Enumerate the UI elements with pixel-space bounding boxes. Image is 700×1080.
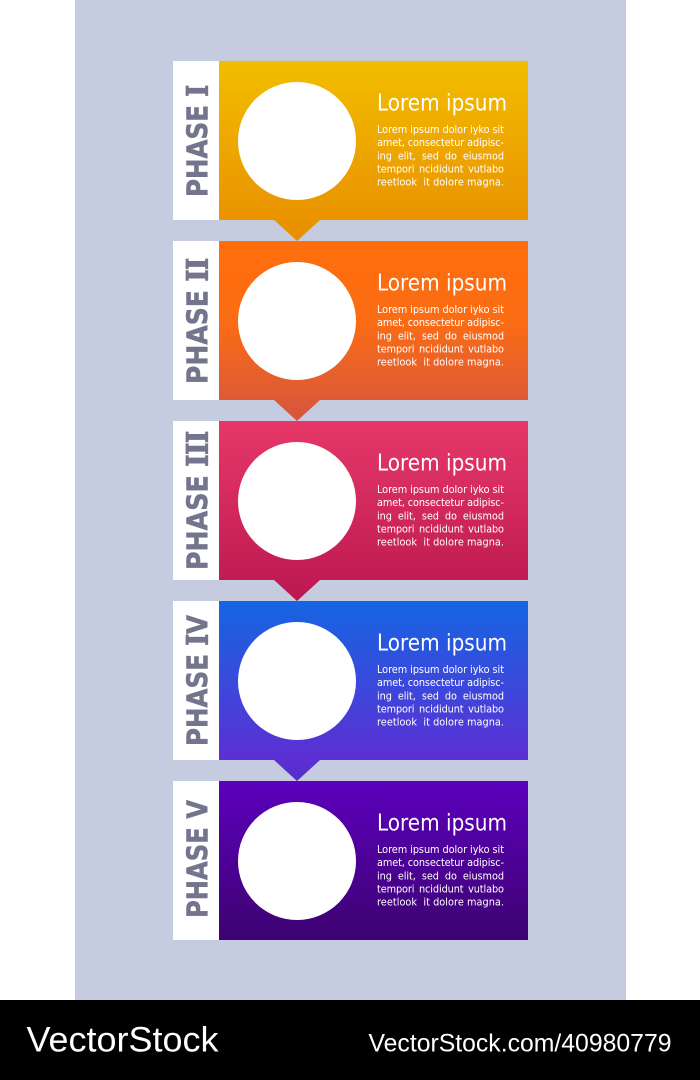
phase V title: Lorem ipsum <box>377 811 507 837</box>
phase V body text: amet, consectetur adipisc- <box>377 856 504 869</box>
phase III body text: reetlook it dolore magna. <box>377 536 504 548</box>
phase II label tab <box>173 241 219 400</box>
phase III label tab <box>173 421 219 580</box>
panel: phase III <box>173 421 528 601</box>
phase I body text: amet, consectetur adipisc- <box>377 136 504 149</box>
footer image reference: VectorStock.com/40980779 <box>368 1030 672 1058</box>
phase I body text: ing elit, sed do eiusmod <box>377 150 504 162</box>
phase III body text: tempori ncididunt vutlabo <box>377 522 504 536</box>
phase III body text: amet, consectetur adipisc- <box>377 496 504 509</box>
phase IV body text: amet, consectetur adipisc- <box>377 676 504 689</box>
phase V body text <box>377 843 504 908</box>
phase III body text: ing elit, sed do eiusmod <box>377 510 504 522</box>
background panel <box>75 0 626 1000</box>
phase II body text <box>377 303 504 368</box>
phase II image circle <box>238 262 356 380</box>
phase V heading: PHASE V <box>182 800 214 918</box>
phase V body text: Lorem ipsum dolor iyko sit <box>377 843 504 856</box>
phase I image circle <box>238 82 356 200</box>
panel: phase I <box>173 61 528 241</box>
phase IV title: Lorem ipsum <box>377 631 507 657</box>
phase III body text: Lorem ipsum dolor iyko sit <box>377 483 504 496</box>
panel: phase V <box>173 781 528 940</box>
footer brand name: VectorStock <box>26 1020 219 1060</box>
phase IV body text: reetlook it dolore magna. <box>377 716 504 728</box>
phase V body text: reetlook it dolore magna. <box>377 896 504 908</box>
phase I body text: reetlook it dolore magna. <box>377 176 504 188</box>
phase II body text: tempori ncididunt vutlabo <box>377 342 504 356</box>
phase IV body text: ing elit, sed do eiusmod <box>377 690 504 702</box>
phase II body text: Lorem ipsum dolor iyko sit <box>377 303 504 316</box>
phase III coloured card with pointer <box>219 421 528 601</box>
phase II body text: amet, consectetur adipisc- <box>377 316 504 329</box>
phase I label tab <box>173 61 219 220</box>
phase I heading: PHASE I <box>180 85 214 197</box>
phase III body text <box>377 483 504 548</box>
phase V label tab <box>173 781 219 940</box>
phase IV label tab <box>173 601 219 760</box>
phase I coloured card with pointer <box>219 61 528 241</box>
phase I body text: tempori ncididunt vutlabo <box>377 162 504 176</box>
phase II title: Lorem ipsum <box>377 271 507 297</box>
phase IV body text <box>377 663 504 728</box>
phase IV body text: tempori ncididunt vutlabo <box>377 702 504 716</box>
phase II heading: PHASE II <box>180 258 214 384</box>
phase V body text: ing elit, sed do eiusmod <box>377 870 504 882</box>
phase I body text <box>377 123 504 188</box>
phase III title: Lorem ipsum <box>377 451 507 477</box>
phase V image circle <box>238 802 356 920</box>
phase I title: Lorem ipsum <box>377 91 507 117</box>
phase V body text: tempori ncididunt vutlabo <box>377 882 504 896</box>
phase II body text: ing elit, sed do eiusmod <box>377 330 504 342</box>
panel: phase IV <box>173 601 528 781</box>
footer bar <box>0 1000 700 1080</box>
phase V coloured card <box>219 781 528 940</box>
phase III image circle <box>238 442 356 560</box>
panel: phase II <box>173 241 528 421</box>
phase IV body text: Lorem ipsum dolor iyko sit <box>377 663 504 676</box>
phase I body text: Lorem ipsum dolor iyko sit <box>377 123 504 136</box>
phase II coloured card with pointer <box>219 241 528 421</box>
phase IV coloured card with pointer <box>219 601 528 781</box>
phase II body text: reetlook it dolore magna. <box>377 356 504 368</box>
phase IV heading: PHASE IV <box>180 615 214 746</box>
phase IV image circle <box>238 622 356 740</box>
phase III heading: PHASE III <box>180 431 214 570</box>
